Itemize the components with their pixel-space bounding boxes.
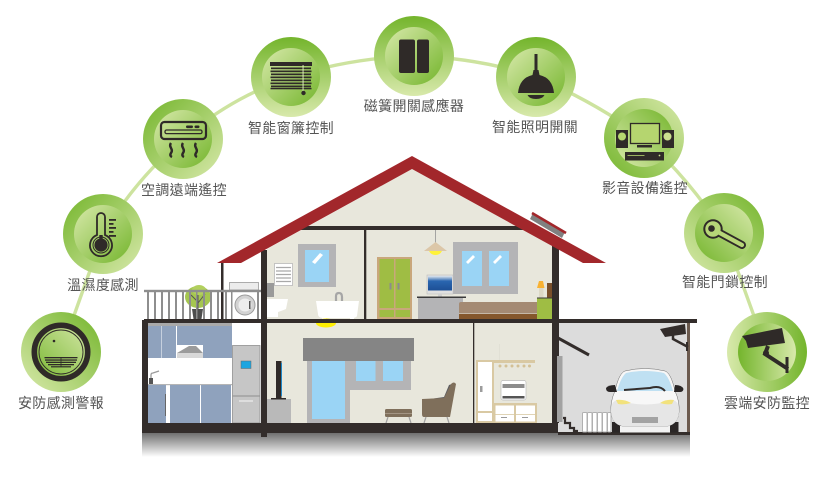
bedroom window <box>453 242 518 294</box>
fridge <box>232 346 260 423</box>
living room window and blind <box>303 338 414 423</box>
icon: blinds <box>251 37 331 117</box>
solar panel <box>530 213 566 238</box>
desk and computer <box>417 275 466 319</box>
armchair <box>422 382 456 423</box>
bathtub <box>316 293 359 320</box>
garage stair beam, column, stairs <box>557 338 589 431</box>
label: camera: 雲端安防監控 <box>724 395 810 411</box>
structural frame <box>142 226 697 437</box>
icon: air conditioner <box>143 99 223 179</box>
ground floor living walls <box>267 323 552 423</box>
icon: reed door sensor <box>374 16 454 96</box>
right room cabinets <box>476 344 537 423</box>
washing machine <box>230 282 258 319</box>
icon: alarm sensor <box>21 312 101 392</box>
icon: pendant lamp <box>496 37 576 117</box>
garage interior <box>558 323 688 432</box>
label: door lock: 智能門鎖控制 <box>682 274 768 290</box>
kitchen <box>148 323 232 423</box>
ceiling lamp <box>424 230 447 255</box>
icon: audio visual <box>604 98 684 178</box>
label: alarm: 安防感測警報 <box>18 395 104 411</box>
ottoman <box>385 409 412 423</box>
label: lighting: 智能照明開關 <box>492 119 578 135</box>
bathroom ceiling light below floor <box>316 318 336 328</box>
car <box>606 368 684 432</box>
garage camera <box>660 324 688 351</box>
garage right wall <box>687 323 690 432</box>
house <box>142 156 697 457</box>
bathroom vent <box>274 264 292 286</box>
label: blinds: 智能窗簾控制 <box>248 120 334 136</box>
bathroom window <box>298 244 336 287</box>
upper floor walls <box>267 169 552 319</box>
balcony post <box>221 263 224 319</box>
ground shadow <box>142 433 690 457</box>
bed <box>459 302 537 319</box>
plant <box>185 285 211 319</box>
radiator <box>582 412 611 432</box>
label: AV: 影音設備遙控 <box>602 180 688 196</box>
wardrobe <box>377 257 412 319</box>
label: humidity: 溫濕度感測 <box>67 277 139 293</box>
icon: thermometer <box>63 194 143 274</box>
icon: cctv camera <box>727 312 807 392</box>
label: reed sensor: 磁簧開關感應器 <box>364 98 464 114</box>
balcony railing <box>144 290 262 319</box>
tv and cabinet <box>267 361 291 423</box>
connecting arc between icons <box>61 56 767 352</box>
icon: key <box>684 193 764 273</box>
label: AC: 空調遠端遙控 <box>141 182 227 198</box>
nightstand and bedside lamp <box>537 281 552 319</box>
toilet <box>267 283 288 317</box>
red roof <box>217 156 606 263</box>
